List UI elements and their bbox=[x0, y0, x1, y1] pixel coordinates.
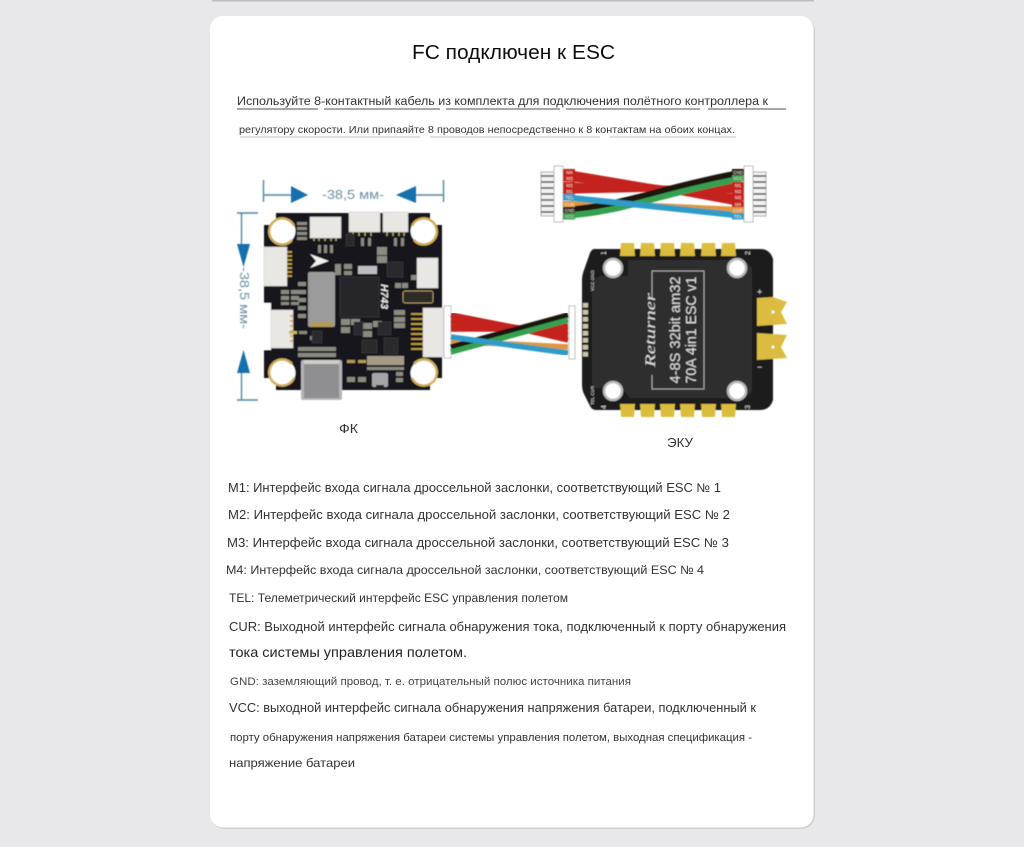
cable wires bbox=[563, 172, 744, 216]
previous card edge bbox=[212, 0, 814, 2]
flight controller board bbox=[263, 212, 451, 400]
FC H743 silkscreen: H743 bbox=[378, 284, 390, 309]
label: ESC: ЭКУ bbox=[667, 436, 693, 450]
VCC description continuation: порту обнаружения напряжения батареи системы управления полетом, выходная спецификация - bbox=[230, 732, 752, 744]
M3 description: M3: Интерфейс входа сигнала дроссельной заслонки, соответствующий ESC № 3 bbox=[227, 536, 729, 550]
cable pin labels bbox=[563, 169, 744, 220]
cable pin labels: GND bbox=[733, 170, 744, 175]
ESC silkscreen numbers: − bbox=[757, 362, 762, 372]
title: FC подключен к ESC bbox=[412, 42, 615, 64]
FC USB-C port bbox=[301, 360, 342, 400]
ESC solder pads bbox=[620, 243, 736, 417]
ESC silkscreen numbers: 2 bbox=[745, 251, 752, 255]
FC crystal bbox=[403, 291, 433, 303]
ESC silkscreen numbers: VCC GND bbox=[590, 269, 595, 291]
ESC label frame bbox=[652, 271, 704, 389]
ESC power pads bbox=[757, 297, 787, 360]
FC mounting holes bbox=[268, 218, 438, 386]
diagram: 8-pin cable bbox=[541, 166, 766, 222]
FC small components bbox=[281, 222, 417, 382]
cable pin labels: M1 bbox=[566, 189, 573, 194]
ESC silkscreen numbers: 3 bbox=[745, 405, 752, 409]
FC chips bbox=[312, 234, 403, 354]
cable pin labels: M3 bbox=[566, 176, 573, 181]
ESC silkscreen numbers: 1 bbox=[601, 251, 608, 255]
FC to ESC cable bbox=[451, 315, 568, 353]
FC connectors bbox=[264, 212, 451, 358]
cable pin labels: GND bbox=[564, 208, 575, 213]
ESC connector bbox=[569, 306, 575, 359]
CUR description: CUR: Выходной интерфейс сигнала обнаружения тока, подключенный к порту обнаружения bbox=[229, 620, 786, 634]
M4 description: M4: Интерфейс входа сигнала дроссельной заслонки, соответствующий ESC № 4 bbox=[226, 563, 704, 577]
cable pin labels: CUR bbox=[565, 202, 575, 207]
cable pin labels: M2 bbox=[735, 189, 742, 194]
ESC board bbox=[569, 243, 787, 417]
pin descriptions bbox=[226, 481, 786, 770]
FC SD card slot bbox=[308, 272, 335, 327]
ESC silkscreen numbers: TEL CUR bbox=[590, 385, 595, 405]
dimension: vertical 38.5 mm bbox=[237, 213, 258, 400]
ESC heat spreader bbox=[592, 260, 752, 398]
ESC label text: 4-8S 32bit am32 bbox=[667, 276, 684, 384]
cable connectors bbox=[541, 166, 766, 222]
CUR description continuation: тока системы управления полетом. bbox=[229, 644, 467, 660]
cable pin labels: M2 bbox=[566, 183, 573, 188]
cable pin labels: M4 bbox=[566, 170, 573, 175]
M2 description: M2: Интерфейс входа сигнала дроссельной заслонки, соответствующий ESC № 2 bbox=[228, 508, 730, 522]
cable pin labels: TEL bbox=[565, 195, 574, 200]
dimension: horizontal 38.5 mm bbox=[263, 180, 444, 203]
dimension: horizontal 38.5 mm: -38,5 мм- bbox=[322, 187, 384, 202]
intro text: регулятору скорости. Или припаяйте 8 проводов непосредственно к 8 контактам на обоих концах. bbox=[239, 124, 735, 136]
GND description: GND: заземляющий провод, т. е. отрицательный полюс источника питания bbox=[230, 676, 631, 688]
ESC mounting holes bbox=[604, 259, 746, 400]
intro text: Используйте 8-контактный кабель из комплекта для подключения полётного контроллера к bbox=[237, 96, 769, 108]
label: FC: ФК bbox=[339, 422, 359, 436]
FC main MCU bbox=[340, 277, 379, 317]
ESC silkscreen numbers: 4 bbox=[601, 405, 608, 409]
ESC silkscreen numbers: + bbox=[757, 287, 762, 297]
cable pin labels: M1 bbox=[735, 183, 742, 188]
FC logo arrow bbox=[310, 254, 329, 268]
ESC signal pads bbox=[583, 303, 588, 359]
ESC label text: Returner bbox=[643, 293, 659, 368]
VCC description end: напряжение батареи bbox=[229, 756, 355, 770]
panel: main card bbox=[210, 16, 815, 829]
M1 description: M1: Интерфейс входа сигнала дроссельной заслонки, соответствующий ESC № 1 bbox=[228, 481, 721, 495]
cable pin labels: VCC bbox=[565, 214, 575, 219]
TEL description: TEL: Телеметрический интерфейс ESC управления полетом bbox=[229, 593, 568, 605]
ESC label text: 70A 4in1 ESC v1 bbox=[683, 276, 700, 384]
cable pin labels: M4 bbox=[735, 202, 742, 207]
FC slide switch bbox=[372, 373, 388, 389]
FC contact pins bbox=[287, 252, 423, 349]
dimension: vertical 38.5 mm: -38,5 мм- bbox=[237, 267, 252, 329]
intro text bbox=[237, 96, 786, 137]
VCC description: VCC: выходной интерфейс сигнала обнаружения напряжения батареи, подключенный к bbox=[229, 701, 757, 715]
ESC label text bbox=[643, 276, 700, 384]
cable pin labels: TEL bbox=[734, 214, 743, 219]
cable pin labels: CUR bbox=[733, 208, 744, 213]
cable pin labels: M3 bbox=[735, 195, 742, 200]
cable pin labels: VCC bbox=[733, 176, 743, 181]
ESC silkscreen numbers bbox=[590, 251, 762, 409]
